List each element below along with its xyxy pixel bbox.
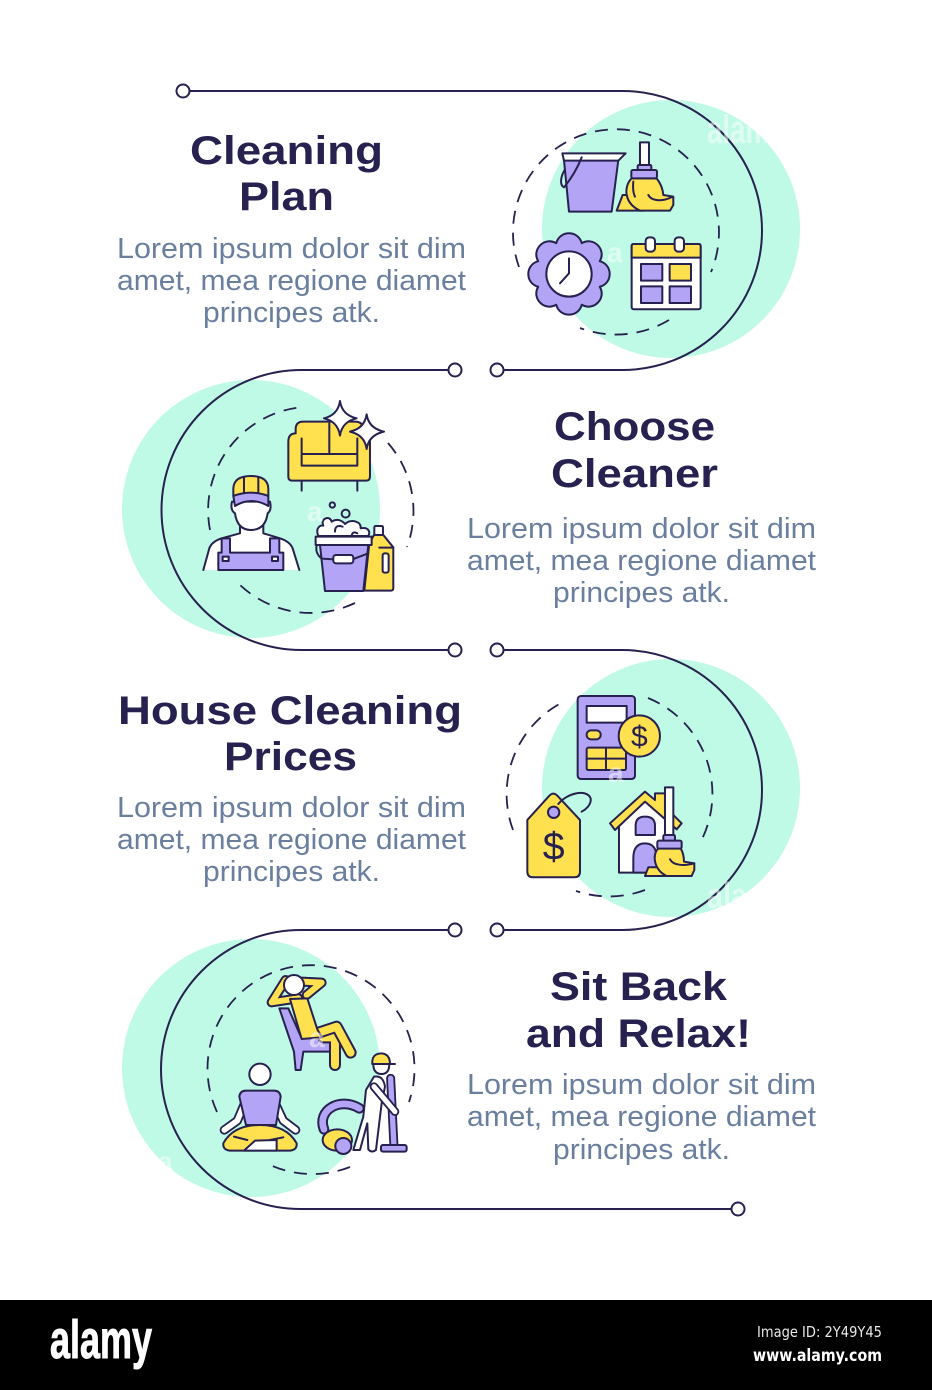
text: cleaning plan body: principes atk. bbox=[203, 297, 380, 329]
icon: bucket with suds bbox=[316, 502, 372, 591]
text: choose cleaner body: Lorem ipsum dolor sit dim bbox=[467, 513, 816, 545]
watermarks: alam bbox=[707, 108, 770, 152]
mint circle 3 bbox=[542, 659, 800, 917]
heading: sit back and relax bbox=[526, 965, 751, 1056]
icon: calendar bbox=[632, 237, 701, 309]
icon: price tag bbox=[527, 793, 591, 877]
icon: calculator with coin: $ bbox=[631, 721, 648, 754]
text: choose cleaner body: amet, mea regione diamet bbox=[467, 545, 816, 577]
dashed ring 3 bbox=[507, 698, 712, 896]
text: choose cleaner body: principes atk. bbox=[553, 577, 730, 609]
text: house cleaning prices body: principes atk. bbox=[203, 856, 380, 888]
watermarks: a bbox=[158, 1146, 173, 1176]
mint circle 4 bbox=[122, 939, 380, 1197]
watermarks: a bbox=[307, 496, 323, 527]
text: cleaning plan body: amet, mea regione diamet bbox=[117, 265, 466, 297]
icon: bucket, mop, clock gear, calendar bbox=[528, 142, 701, 315]
icon: meditating person bbox=[223, 1064, 297, 1151]
icon: bottle bbox=[364, 526, 393, 591]
text: sit back and relax body: amet, mea regione diamet bbox=[467, 1101, 816, 1133]
watermarks: a bbox=[309, 1022, 325, 1053]
text: choose cleaner body bbox=[467, 513, 816, 609]
heading: cleaning plan: Cleaning bbox=[190, 129, 383, 173]
text: sit back and relax body: principes atk. bbox=[553, 1134, 730, 1166]
footer url: www.alamy.com bbox=[753, 1346, 882, 1366]
mint circle 1 bbox=[542, 100, 800, 358]
icon: sparkling sofa bbox=[288, 401, 384, 491]
dashed ring 4 bbox=[208, 965, 415, 1174]
heading: choose cleaner: Cleaner bbox=[551, 452, 718, 496]
watermarks: ala bbox=[707, 875, 748, 916]
panel: choose cleaner bbox=[122, 364, 816, 656]
icon: calculator, price tag, house with mop bbox=[527, 696, 694, 877]
text: house cleaning prices body: amet, mea regione diamet bbox=[117, 824, 466, 856]
icon: price tag: $ bbox=[543, 824, 565, 868]
text: sit back and relax body bbox=[467, 1069, 816, 1166]
text: sit back and relax body: Lorem ipsum dolor sit dim bbox=[467, 1069, 816, 1101]
footer bar bbox=[0, 1300, 932, 1390]
connector 3 bbox=[490, 644, 762, 936]
text: cleaning plan body: Lorem ipsum dolor sit dim bbox=[117, 233, 466, 265]
heading: choose cleaner: Choose bbox=[554, 405, 715, 449]
heading: house cleaning prices: House Cleaning bbox=[118, 689, 462, 733]
icon: sofa, cleaner, suds bucket, bottle bbox=[203, 401, 393, 591]
panel: house cleaning prices bbox=[117, 644, 800, 936]
heading: sit back and relax: and Relax! bbox=[526, 1012, 751, 1056]
text: cleaning plan body bbox=[117, 233, 466, 329]
icon: calculator with coin bbox=[578, 696, 660, 779]
connector 2 bbox=[161, 364, 461, 656]
icon: relaxing person, meditating person, vacuuming cleaner bbox=[223, 975, 407, 1154]
heading: sit back and relax: Sit Back bbox=[550, 965, 728, 1009]
panel: cleaning plan bbox=[117, 84, 800, 376]
dashed ring 2 bbox=[208, 407, 413, 613]
heading: house cleaning prices: Prices bbox=[224, 735, 357, 779]
icon: mop bbox=[617, 142, 673, 211]
icon: cleaner in overalls bbox=[203, 476, 299, 570]
watermarks: a bbox=[607, 237, 623, 268]
heading: house cleaning prices bbox=[118, 689, 462, 779]
mint circle 2 bbox=[122, 380, 380, 638]
icon: vacuum and cleaner bbox=[323, 1053, 407, 1154]
heading: cleaning plan bbox=[190, 129, 383, 219]
footer logo: alamy bbox=[50, 1310, 152, 1370]
watermarks: a bbox=[608, 757, 624, 788]
icon: house with mop bbox=[610, 787, 694, 876]
footer image id: Image ID: 2Y49Y45 bbox=[757, 1323, 882, 1341]
dashed ring 1 bbox=[513, 129, 719, 335]
icon: person reclining in chair bbox=[272, 975, 351, 1070]
icon: bucket bbox=[561, 153, 626, 212]
panel: sit back and relax bbox=[122, 924, 816, 1216]
heading: choose cleaner bbox=[551, 405, 718, 496]
icon: clock gear bbox=[528, 233, 610, 315]
text: house cleaning prices body bbox=[117, 792, 466, 888]
connector 1 bbox=[176, 84, 762, 376]
watermarks bbox=[158, 108, 770, 1176]
heading: cleaning plan: Plan bbox=[239, 175, 334, 219]
connector 4 bbox=[161, 924, 744, 1216]
text: house cleaning prices body: Lorem ipsum dolor sit dim bbox=[117, 792, 466, 824]
